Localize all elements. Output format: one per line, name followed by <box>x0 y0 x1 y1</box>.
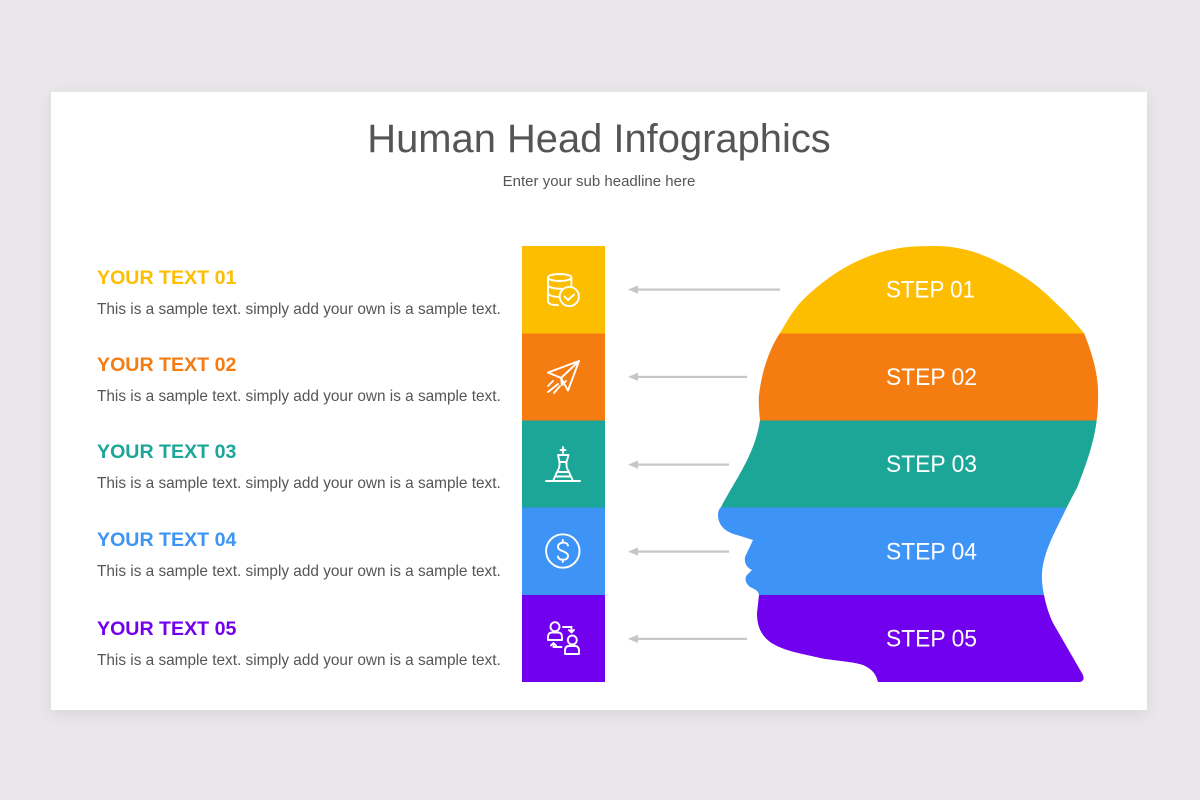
text block: item 05 <box>97 618 501 669</box>
step labels: STEP 05 <box>886 626 977 652</box>
icon: paper plane <box>548 361 579 393</box>
step labels <box>886 276 977 652</box>
arrow 3 <box>628 460 729 469</box>
step labels: STEP 04 <box>886 538 977 566</box>
subtitle: Enter your sub headline here <box>503 173 695 190</box>
arrow 4 <box>628 548 729 556</box>
icon: database with check <box>548 274 579 306</box>
title: Human Head Infographics <box>367 117 831 161</box>
arrow 5 <box>628 635 747 643</box>
icon: chess king <box>546 447 580 481</box>
text block: item 04 <box>97 529 501 580</box>
text block: item 01 <box>97 267 501 318</box>
step labels: STEP 01 <box>886 276 975 304</box>
text block: item 05: YOUR TEXT 05 <box>97 618 236 640</box>
arrow 1 <box>628 286 780 294</box>
text block: item 03: YOUR TEXT 03 <box>97 441 236 463</box>
head silhouette <box>718 246 1098 682</box>
icon: dollar coin <box>546 534 580 568</box>
step labels: STEP 03 <box>886 451 977 478</box>
text block: item 01: This is a sample text. simply add your own is a sample text. <box>97 301 501 318</box>
icon: people exchange <box>548 622 579 654</box>
text block: item 02: This is a sample text. simply add your own is a sample text. <box>97 388 501 405</box>
text block: item 03 <box>97 441 501 492</box>
text block: item 05: This is a sample text. simply add your own is a sample text. <box>97 652 501 669</box>
text block: item 04: This is a sample text. simply add your own is a sample text. <box>97 563 501 580</box>
vertical colour bar <box>522 246 605 682</box>
text block: item 03: This is a sample text. simply add your own is a sample text. <box>97 475 501 492</box>
step labels: STEP 02 <box>886 364 977 391</box>
panel: white card <box>51 92 1147 710</box>
infographic drawing <box>522 246 1098 682</box>
text block: item 02: YOUR TEXT 02 <box>97 354 236 376</box>
text block: item 04: YOUR TEXT 04 <box>97 529 236 551</box>
arrow 2 <box>628 373 747 381</box>
text block: item 02 <box>97 354 501 405</box>
text block: item 01: YOUR TEXT 01 <box>97 267 236 289</box>
